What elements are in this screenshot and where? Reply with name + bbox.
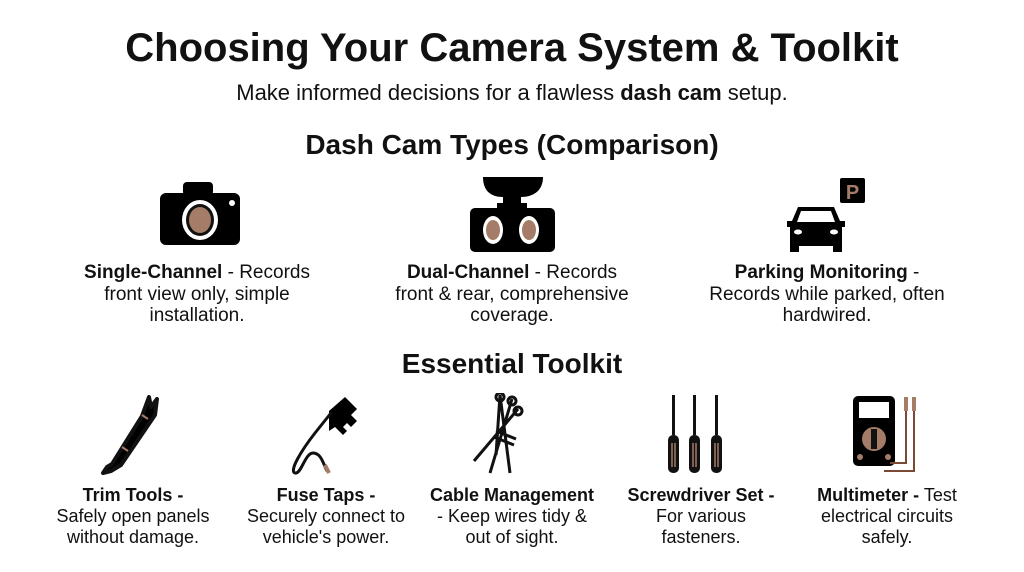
heading: dash cam types: Dash Cam Types (Comparison) [305, 129, 719, 160]
text: cable management [430, 485, 594, 547]
subtitle: Make informed decisions for a flawless dash cam setup. [236, 80, 788, 105]
text: parking: hardwired. [783, 305, 871, 326]
text: cable management: Cable Management [430, 485, 594, 505]
text: fuse taps: Fuse Taps - [277, 485, 375, 505]
text: multimeter: safely. [862, 527, 912, 547]
text: trim tools: Trim Tools - [83, 485, 183, 505]
text: trim tools: Safely open panels [56, 506, 210, 526]
text: multimeter: electrical circuits [821, 506, 953, 526]
text: single-channel [84, 262, 310, 326]
icon: cable ties [472, 393, 524, 474]
text: single-channel: Single-Channel - Records [84, 262, 310, 283]
text: screwdriver set: Screwdriver Set - [627, 485, 775, 505]
text: dual-channel: Dual-Channel - Records [407, 262, 617, 283]
icon: multimeter [853, 396, 916, 472]
heading: toolkit: Essential Toolkit [402, 348, 622, 379]
icon: trim tool [101, 395, 159, 475]
text: fuse taps: Securely connect to [247, 506, 405, 526]
text: fuse taps: vehicle's power. [263, 527, 389, 547]
text: multimeter [817, 485, 957, 547]
text: single-channel: front view only, simple [104, 284, 290, 304]
text: screwdriver set [627, 485, 775, 547]
icon: screwdrivers [668, 395, 722, 473]
text: parking [709, 262, 945, 326]
icon: fuse tap [292, 397, 357, 475]
text: trim tools: without damage. [67, 527, 199, 547]
text: dual-channel: coverage. [470, 305, 554, 326]
text: fuse taps [247, 485, 405, 547]
text: dual-channel: front & rear, comprehensive [395, 284, 629, 304]
text: parking: Parking Monitoring - [735, 262, 919, 283]
text: trim tools [56, 485, 210, 547]
icon: dual cam [470, 177, 555, 252]
text: single-channel: installation. [149, 305, 245, 326]
text: cable management: out of sight. [465, 527, 559, 547]
text: dual-channel [395, 262, 629, 326]
title: Choosing Your Camera System & Toolkit [125, 26, 899, 70]
icon: parked car [787, 178, 865, 252]
text: screwdriver set: fasteners. [661, 527, 741, 547]
text: screwdriver set: For various [656, 506, 746, 526]
text: multimeter: Multimeter - Test [817, 485, 957, 505]
icon: parked car: P [846, 182, 859, 204]
text: parking: Records while parked, often [709, 284, 945, 304]
text: cable management: - Keep wires tidy & [437, 506, 587, 526]
icon: camera [160, 182, 240, 245]
